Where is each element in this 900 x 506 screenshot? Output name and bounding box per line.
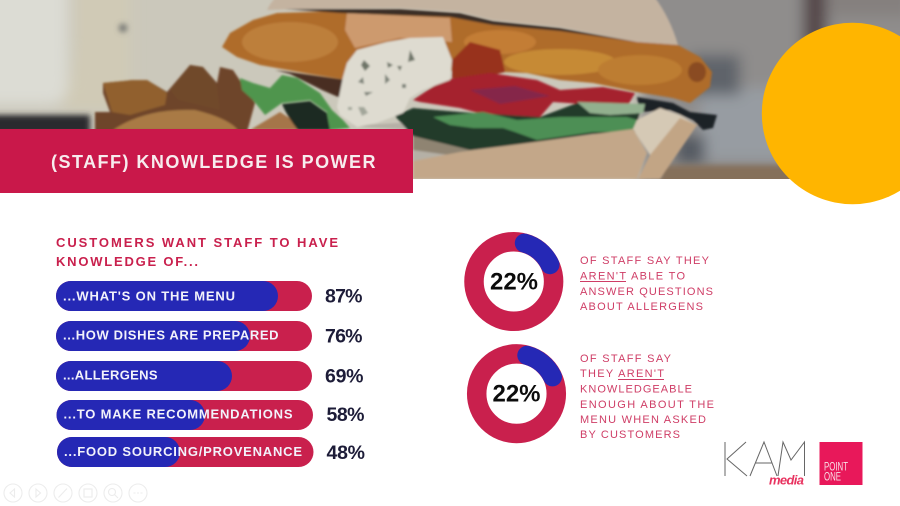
menu knowledge statement: BY CUSTOMERS [580, 429, 680, 441]
allergens statement: OF STAFF SAY THEY [580, 255, 710, 267]
top bun [267, 0, 678, 45]
bar chart heading: KNOWLEDGE OF... [56, 254, 198, 269]
donut chart: menu knowledge 22% [477, 354, 556, 434]
shadow under bun [285, 9, 637, 42]
bar: food sourcing/provenance 48%: 48% [326, 442, 365, 464]
allergens statement: AREN'T ABLE TO [580, 270, 685, 282]
header photo: chicken burger [0, 0, 900, 190]
menu knowledge statement: KNOWLEDGEABLE [580, 384, 692, 396]
menu knowledge statement: THEY AREN'T [580, 368, 664, 380]
bar: allergens 69%: 69% [325, 366, 364, 388]
menu knowledge statement: OF STAFF SAY [580, 353, 672, 365]
logo: Point One: POINT [824, 460, 848, 474]
bar: what's on the menu 87%: 87% [325, 286, 362, 308]
allergens statement [580, 255, 713, 313]
logo: KAM media [725, 442, 804, 488]
allergens statement: ANSWER QUESTIONS [580, 286, 713, 298]
yellow circle [762, 23, 900, 204]
slideshow player controls [4, 484, 147, 502]
left lettuce [240, 75, 350, 130]
bar chart: what staff should know [56, 281, 365, 467]
bar: to make recommendations 58% [56, 400, 364, 430]
bar: what's on the menu 87%: ...WHAT'S ON THE MENU [63, 288, 235, 304]
bar: to make recommendations 58%: 58% [326, 404, 364, 426]
dark shadow below chicken [275, 70, 347, 100]
potato wedges [95, 65, 308, 132]
bar: how dishes are prepared 76%: ...HOW DISHES ARE PREPARED [63, 328, 278, 342]
bar chart heading [56, 235, 338, 269]
bar: what's on the menu 87% [56, 281, 362, 311]
tomato slices [413, 73, 635, 117]
menu knowledge statement: ENOUGH ABOUT THE [580, 399, 714, 411]
crispy chicken fillet [222, 11, 712, 103]
donut chart: allergens 22%: 22% [490, 268, 538, 296]
bar: to make recommendations 58%: ...TO MAKE RECOMMENDATIONS [64, 406, 293, 422]
lower lettuce [395, 102, 645, 150]
bar: food sourcing/provenance 48%: ...FOOD SOURCING/PROVENANCE [64, 444, 302, 459]
bar: allergens 69%: ...ALLERGENS [63, 368, 158, 382]
donut chart: menu knowledge 22%: 22% [492, 380, 540, 408]
allergens statement: ABOUT ALLERGENS [580, 301, 703, 313]
menu knowledge statement [580, 353, 714, 441]
bar: allergens 69% [56, 361, 364, 391]
dark lettuce at rear [637, 97, 717, 130]
title: (STAFF) KNOWLEDGE IS POWER [51, 152, 376, 172]
bar: how dishes are prepared 76% [56, 321, 362, 351]
cardboard box [413, 108, 697, 179]
lower bun and base of burger [364, 114, 640, 161]
title banner [0, 129, 413, 193]
bar: how dishes are prepared 76%: 76% [325, 326, 362, 348]
logo: Point One [820, 442, 862, 485]
bar: food sourcing/provenance 48% [57, 437, 365, 467]
donut chart: allergens 22% [474, 242, 554, 321]
logo: KAM media: media [769, 472, 804, 488]
menu knowledge statement: MENU WHEN ASKED [580, 414, 706, 426]
logo: Point One: ONE [824, 470, 841, 484]
bar chart heading: CUSTOMERS WANT STAFF TO HAVE [56, 235, 338, 250]
ranch sauce [337, 37, 452, 127]
